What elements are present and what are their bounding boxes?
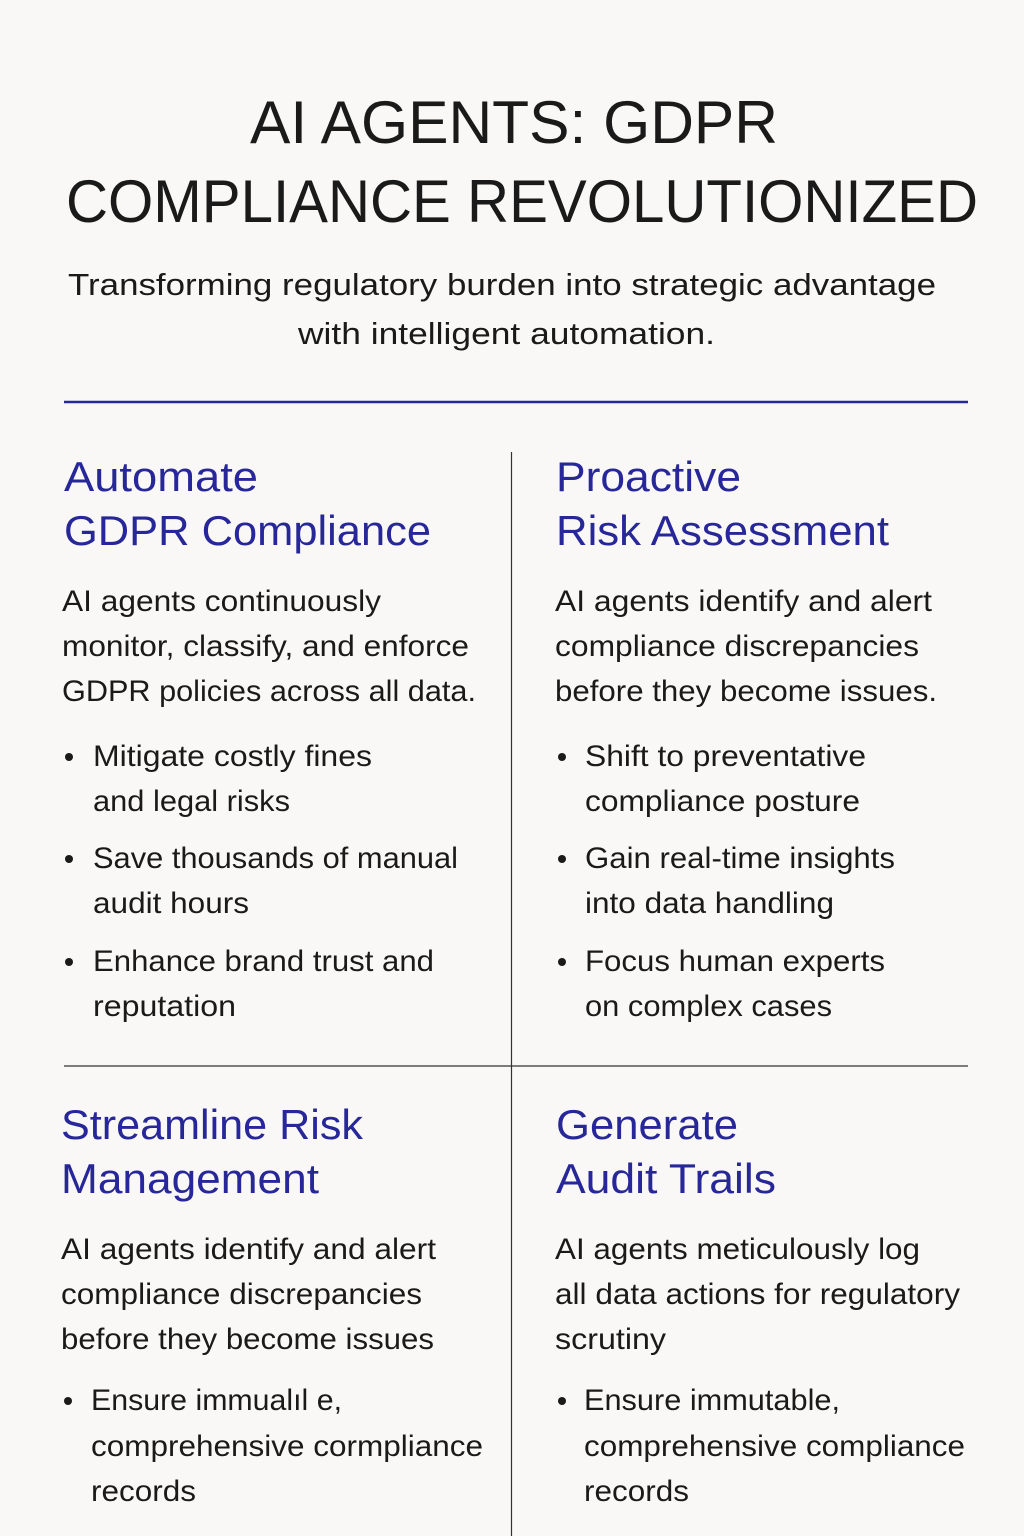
bullets: streamline: comprehensive cormpliance (91, 1430, 483, 1463)
bullets: proactive: into data handling (585, 887, 834, 920)
text: proactive description: before they become issues. (555, 675, 937, 708)
text: streamline description: compliance discrepancies (61, 1278, 422, 1311)
panel: streamline risk management (61, 1101, 483, 1508)
bullets: automate (65, 740, 458, 1023)
text: automate description: AI agents continuously (62, 585, 381, 618)
bullets: streamline (64, 1384, 483, 1508)
bullets: audit (558, 1384, 965, 1508)
bullets: streamline: Ensure immualıl e, (91, 1384, 342, 1417)
bullets: proactive (558, 740, 895, 1023)
bullets: proactive: Shift to preventative (585, 740, 866, 773)
subtitle: Transforming regulatory burden into strategic advantage (68, 267, 936, 302)
heading: audit trails: Generate (556, 1101, 738, 1148)
subtitle: with intelligent automation. (297, 316, 715, 351)
heading: audit trails (556, 1101, 776, 1202)
bullets: automate: audit hours (93, 887, 249, 920)
bullets: automate: Mitigate costly fines (93, 740, 372, 773)
bullets: automate: and legal risks (93, 785, 290, 818)
heading: audit trails: Audit Trails (556, 1155, 776, 1202)
panel: proactive risk assessment (555, 453, 937, 1023)
heading: streamline: Management (61, 1155, 319, 1202)
bullets: audit: Ensure immutable, (584, 1384, 840, 1417)
text: streamline description: AI agents identify and alert (61, 1233, 437, 1266)
heading: proactive (556, 453, 889, 554)
bullets: automate: reputation (93, 990, 236, 1023)
text: streamline description (61, 1233, 437, 1356)
bullets: automate: Save thousands of manual (93, 842, 458, 875)
text: proactive description: AI agents identify and alert (555, 585, 933, 618)
bullets: proactive: Gain real-time insights (585, 842, 895, 875)
bullets: streamline: records (91, 1475, 196, 1508)
text: proactive description: compliance discrepancies (555, 630, 919, 663)
heading: automate: GDPR Compliance (64, 507, 431, 554)
title: COMPLIANCE REVOLUTIONIZED (66, 168, 978, 235)
text: audit description: all data actions for regulatory (555, 1278, 960, 1311)
text: streamline description: before they become issues (61, 1323, 434, 1356)
text: audit description: scrutiny (555, 1323, 666, 1356)
bullets: automate: Enhance brand trust and (93, 945, 434, 978)
bullets: proactive: on complex cases (585, 990, 832, 1023)
text: automate description (62, 585, 476, 708)
heading: streamline: Streamline Risk (61, 1101, 364, 1148)
text: audit description: AI agents meticulously log (555, 1233, 920, 1266)
heading: proactive: Risk Assessment (556, 507, 889, 554)
heading: streamline (61, 1101, 364, 1202)
text: automate description: monitor, classify, and enforce (62, 630, 469, 663)
heading: proactive: Proactive (556, 453, 741, 500)
heading: automate: Automate (64, 453, 258, 500)
bullets: proactive: Focus human experts (585, 945, 885, 978)
text: audit description (555, 1233, 960, 1356)
bullets: audit: records (584, 1475, 689, 1508)
bullets: audit: comprehensive compliance (584, 1430, 965, 1463)
text: automate description: GDPR policies across all data. (62, 675, 476, 708)
subtitle (68, 267, 936, 351)
text: proactive description (555, 585, 937, 708)
heading: automate (64, 453, 431, 554)
panel: generate audit trails (555, 1101, 965, 1508)
title: AI AGENTS: GDPR (250, 89, 778, 156)
bullets: proactive: compliance posture (585, 785, 860, 818)
title (66, 89, 978, 235)
panel: automate GDPR compliance (62, 453, 476, 1023)
